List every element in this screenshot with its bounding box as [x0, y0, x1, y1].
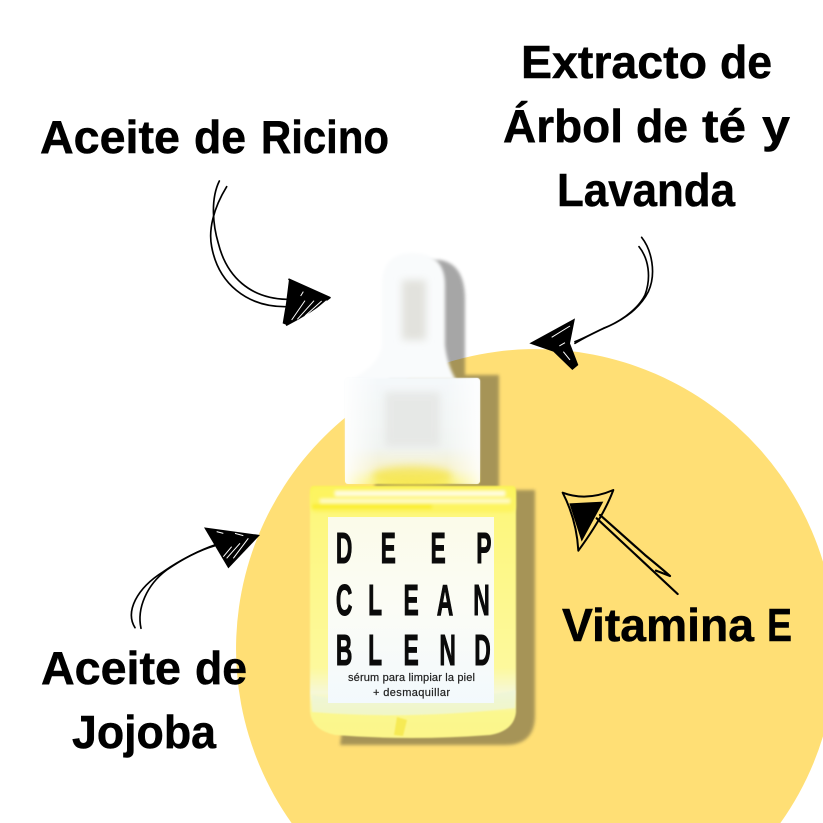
text: Extracto de Árbol de té y Lavanda: Árbol [503, 100, 623, 152]
glass jar [310, 486, 516, 738]
product bottle [310, 253, 516, 738]
text: Aceite de Ricino: Ricino [261, 111, 389, 163]
background yellow circle [236, 349, 823, 823]
dropper collar [345, 378, 480, 486]
bottle drop shadow [340, 260, 535, 745]
label title: DEEP CLEAN BLEND: BLEND [336, 626, 491, 675]
arrow: Extracto de Árbol de té y Lavanda [529, 237, 653, 370]
glass rim highlights [311, 488, 515, 512]
text: Extracto de Árbol de té y Lavanda: y [762, 100, 790, 152]
label title: DEEP CLEAN BLEND: DEEP [336, 524, 492, 573]
label title: DEEP CLEAN BLEND: CLEAN [336, 576, 490, 625]
text: Aceite de Jojoba: Aceite [41, 642, 181, 694]
text: Extracto de Árbol de té y Lavanda: Extracto [521, 36, 707, 88]
bottle label [328, 517, 494, 703]
text: Vitamina E: Vitamina [562, 599, 754, 651]
text: Extracto de Árbol de té y Lavanda: de [720, 36, 772, 88]
arrow: Aceite de Ricino [211, 181, 330, 325]
text: Aceite de Ricino [40, 111, 389, 163]
text: Extracto de Árbol de té y Lavanda [503, 36, 790, 216]
text: Aceite de Jojoba: de [195, 642, 247, 694]
arrow: Vitamina E [563, 490, 678, 594]
text: Aceite de Jojoba [41, 642, 247, 758]
text: Extracto de Árbol de té y Lavanda: té [702, 100, 746, 152]
text: Aceite de Ricino: de [194, 111, 246, 163]
label title: DEEP CLEAN BLEND [336, 524, 492, 675]
text: Aceite de Ricino: Aceite [40, 111, 180, 163]
label subtitle [348, 672, 475, 699]
label subtitle: sérum para limpiar la piel [348, 672, 475, 684]
text: Vitamina E: E [767, 599, 792, 651]
label subtitle: + desmaquillar [373, 687, 450, 699]
dropper bulb [350, 253, 456, 380]
text: Aceite de Jojoba: Jojoba [72, 706, 216, 758]
text: Extracto de Árbol de té y Lavanda: Lavanda [557, 164, 735, 216]
text: Extracto de Árbol de té y Lavanda: de [636, 100, 688, 152]
arrow: Aceite de Jojoba [131, 527, 260, 628]
